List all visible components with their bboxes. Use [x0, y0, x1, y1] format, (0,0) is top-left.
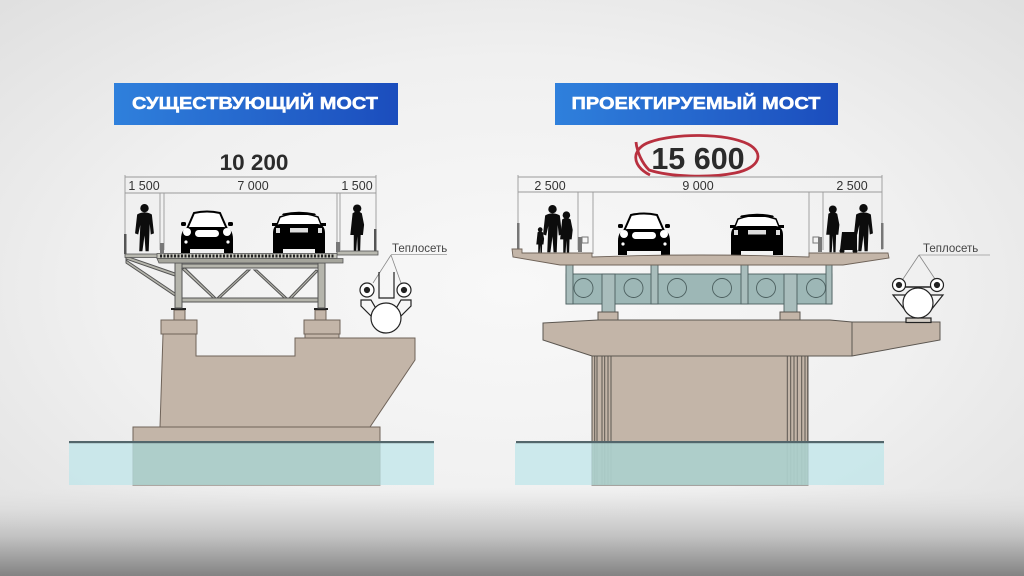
deck: planned bridge: [512, 249, 889, 265]
dimension labels: existing bridge: 1 500: [341, 179, 373, 193]
heat pipe label: existing bridge: Теплосеть: [392, 243, 447, 255]
dimension lines: existing bridge: [125, 175, 376, 255]
heat pipe: planned bridge: [892, 255, 944, 322]
dimension lines: planned bridge: [518, 175, 882, 254]
pier: existing bridge: [133, 308, 415, 485]
cars: existing bridge: [181, 212, 326, 253]
steel box girder: planned bridge: [566, 265, 832, 312]
dimension labels: existing bridge: 7 000: [237, 179, 269, 193]
total width: planned bridge: 15 600: [651, 142, 745, 176]
bottom shadow band: [0, 488, 1024, 576]
heading: planned bridge: ПРОЕКТИРУЕМЫЙ МОСТ: [572, 92, 821, 113]
pedestrians with stroller: planned bridge right: [826, 204, 873, 254]
dimension labels: planned bridge: 2 500: [534, 179, 566, 193]
deck: existing bridge: [124, 229, 378, 263]
dimension labels: planned bridge: 2 500: [836, 179, 868, 193]
railings and barriers: planned bridge: [517, 223, 884, 252]
heading: planned bridge: [555, 83, 838, 125]
heading: existing bridge: СУЩЕСТВУЮЩИЙ МОСТ: [132, 92, 378, 113]
dimension labels: planned bridge: 9 000: [682, 179, 714, 193]
dimension labels: existing bridge: 1 500: [128, 179, 160, 193]
dimension labels: existing bridge: [128, 179, 373, 193]
heat pipe label: planned bridge: Теплосеть: [923, 243, 978, 255]
total width: existing bridge: 10 200: [220, 150, 288, 175]
cars: planned bridge: [618, 214, 784, 255]
pier with piles: planned bridge: [543, 312, 940, 485]
pedestrians with family: planned bridge left: [536, 205, 573, 256]
pedestrians: existing bridge: [135, 204, 364, 253]
water: planned bridge: [515, 441, 884, 485]
water: existing bridge: [69, 441, 434, 485]
steel truss: existing bridge: [126, 256, 325, 308]
heat pipe: existing bridge: [360, 255, 411, 333]
heading: existing bridge: [114, 83, 398, 125]
dimension labels: planned bridge: [534, 179, 868, 193]
red hand-drawn circle: [636, 135, 758, 176]
